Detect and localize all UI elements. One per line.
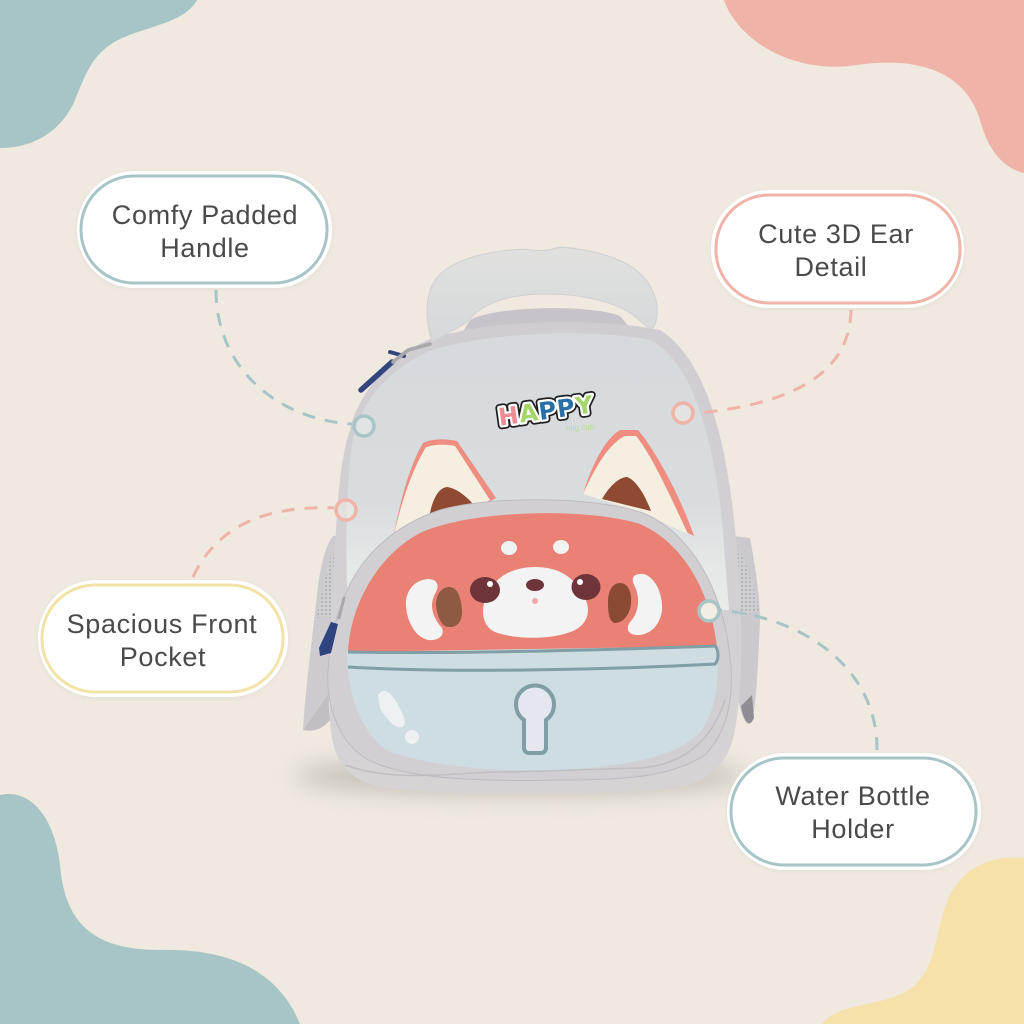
- pocket zipper pull: [319, 598, 344, 656]
- body front panel: [346, 333, 729, 610]
- front pocket pink upper: [348, 513, 717, 652]
- connector: front pocket: [193, 500, 356, 577]
- callout: Comfy Padded Handle: Handle: [160, 233, 250, 263]
- left ear: [393, 439, 496, 540]
- brand logo: HAPPY: [497, 390, 596, 432]
- callout: Comfy Padded Handle: [77, 171, 332, 288]
- callout: Spacious Front Pocket: Spacious Front: [67, 609, 257, 639]
- connector: 3D ear: [673, 310, 851, 423]
- callout: Water Bottle Holder: Water Bottle: [775, 781, 931, 811]
- decorative blob: top left: [0, 0, 197, 148]
- right ear: [583, 430, 694, 536]
- connector: padded handle: [216, 290, 374, 436]
- brand logo: HAPPY: [497, 390, 596, 432]
- connector: water bottle holder: [699, 601, 877, 750]
- handle: [427, 247, 657, 342]
- red panda face: [406, 540, 662, 640]
- callout: Comfy Padded Handle: Comfy Padded: [112, 200, 298, 230]
- top zipper pull: [361, 344, 430, 390]
- front pocket blue lower: [347, 646, 718, 770]
- left side mesh pocket: [303, 536, 345, 731]
- callout: Water Bottle Holder: Holder: [811, 814, 895, 844]
- callout: Cute 3D Ear Detail: Detail: [795, 252, 867, 282]
- callout: Spacious Front Pocket: Pocket: [120, 642, 206, 672]
- backpack body shell: [330, 322, 741, 794]
- brand logo: HAPPY: [497, 390, 596, 432]
- handle base: [455, 308, 640, 345]
- callout: Cute 3D Ear Detail: Cute 3D Ear: [758, 219, 914, 249]
- pocket highlights: [378, 691, 419, 744]
- decorative blob: bottom left: [0, 794, 300, 1024]
- right side mesh pocket: [725, 535, 760, 724]
- callout: Spacious Front Pocket: [38, 580, 288, 697]
- callout: Cute 3D Ear Detail: [711, 190, 964, 308]
- backpack illustration: [303, 247, 760, 794]
- decorative blob: top right: [724, 0, 1024, 173]
- brand sub text: hug cub: [566, 422, 595, 433]
- pocket stripes: [348, 646, 718, 670]
- pocket bottom seam: [345, 700, 725, 776]
- front pocket rim: [328, 500, 731, 780]
- ground shadow: [295, 758, 745, 794]
- callout: Water Bottle Holder: [727, 753, 981, 870]
- decorative blob: bottom right: [822, 857, 1024, 1024]
- keyhole: [516, 686, 554, 753]
